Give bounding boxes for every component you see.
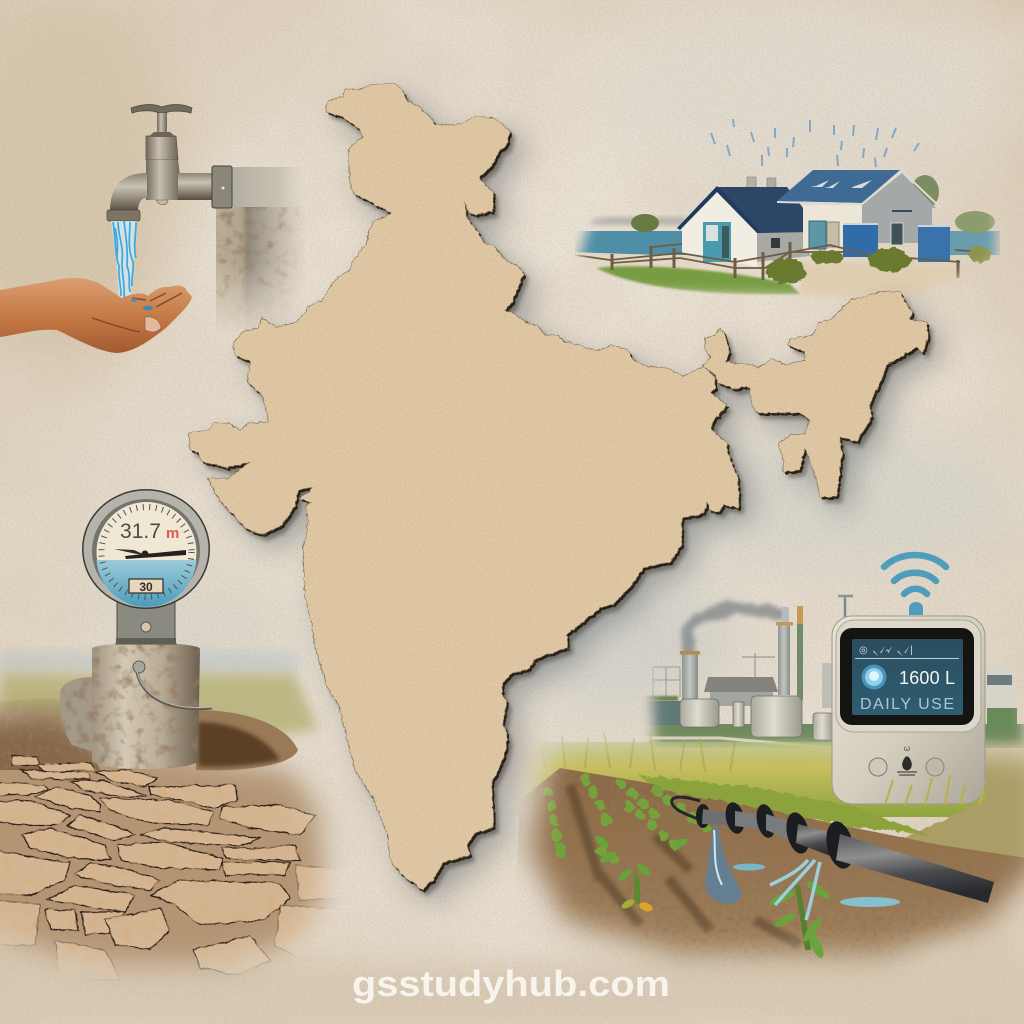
gauge unit: m [166, 525, 179, 542]
blue water tanks [843, 223, 950, 262]
storage tanks [680, 696, 833, 740]
bushes [766, 245, 991, 284]
path [630, 738, 832, 748]
chimneys [680, 606, 803, 700]
field ground [516, 742, 1024, 974]
pipe [232, 167, 307, 207]
panel: rainwater house [570, 119, 1000, 300]
icon: wifi signal [884, 555, 946, 615]
gauge [82, 489, 210, 644]
droplet indicator [862, 664, 886, 690]
bracket [116, 600, 176, 644]
device controls: ω [904, 744, 910, 753]
hand [0, 278, 192, 353]
tall grass stalks [540, 732, 735, 772]
concrete well cylinder [92, 643, 212, 769]
northeast states [703, 291, 928, 497]
panel: smart water meter [832, 555, 985, 805]
well pit [60, 677, 298, 770]
device controls [869, 744, 944, 776]
water stream [111, 221, 137, 298]
large seedlings [552, 834, 689, 913]
map of India [189, 83, 928, 890]
cracked earth [0, 698, 342, 981]
daily use caption: DAILY USE [860, 696, 954, 713]
right house [777, 170, 942, 252]
plant hall [704, 677, 778, 706]
concrete pillar [216, 207, 306, 332]
grass at device foot [885, 775, 983, 805]
smoke plume [687, 608, 778, 650]
water drips [705, 826, 900, 920]
panel: factory behind field [630, 596, 1024, 748]
panel: faucet and hand [0, 104, 307, 353]
ground strip [630, 724, 1024, 748]
sand and grass [596, 263, 1000, 300]
lake and far trees [570, 175, 1000, 272]
gauge reading: 31.7 [120, 520, 161, 543]
icon: drip pipe [672, 797, 994, 920]
mainland [189, 83, 739, 890]
soil furrows [570, 785, 800, 945]
distant haze and grass [0, 652, 318, 740]
back structures [640, 596, 1017, 728]
watermark: gsstudyhub.com [352, 963, 670, 1004]
gauge needle [114, 549, 186, 559]
daily usage value: 1600 L [899, 668, 955, 688]
teal door [703, 222, 731, 262]
device screen [840, 628, 974, 725]
fence [575, 242, 985, 280]
left cottage [677, 177, 810, 267]
device body [832, 616, 985, 804]
rain drops [711, 119, 919, 167]
seedling rows [548, 778, 710, 862]
gauge digit box: 30 [139, 580, 153, 594]
gauge digit box [129, 579, 163, 594]
panel: groundwater gauge on cracked earth [0, 489, 342, 981]
map shadow [191, 86, 942, 904]
device screen: ◎ ৲৴৵ ৲৴| [859, 645, 914, 657]
plant watered by drip [768, 879, 832, 960]
panel: irrigated field [500, 732, 1024, 990]
faucet [107, 104, 232, 221]
handle wire [133, 661, 212, 709]
